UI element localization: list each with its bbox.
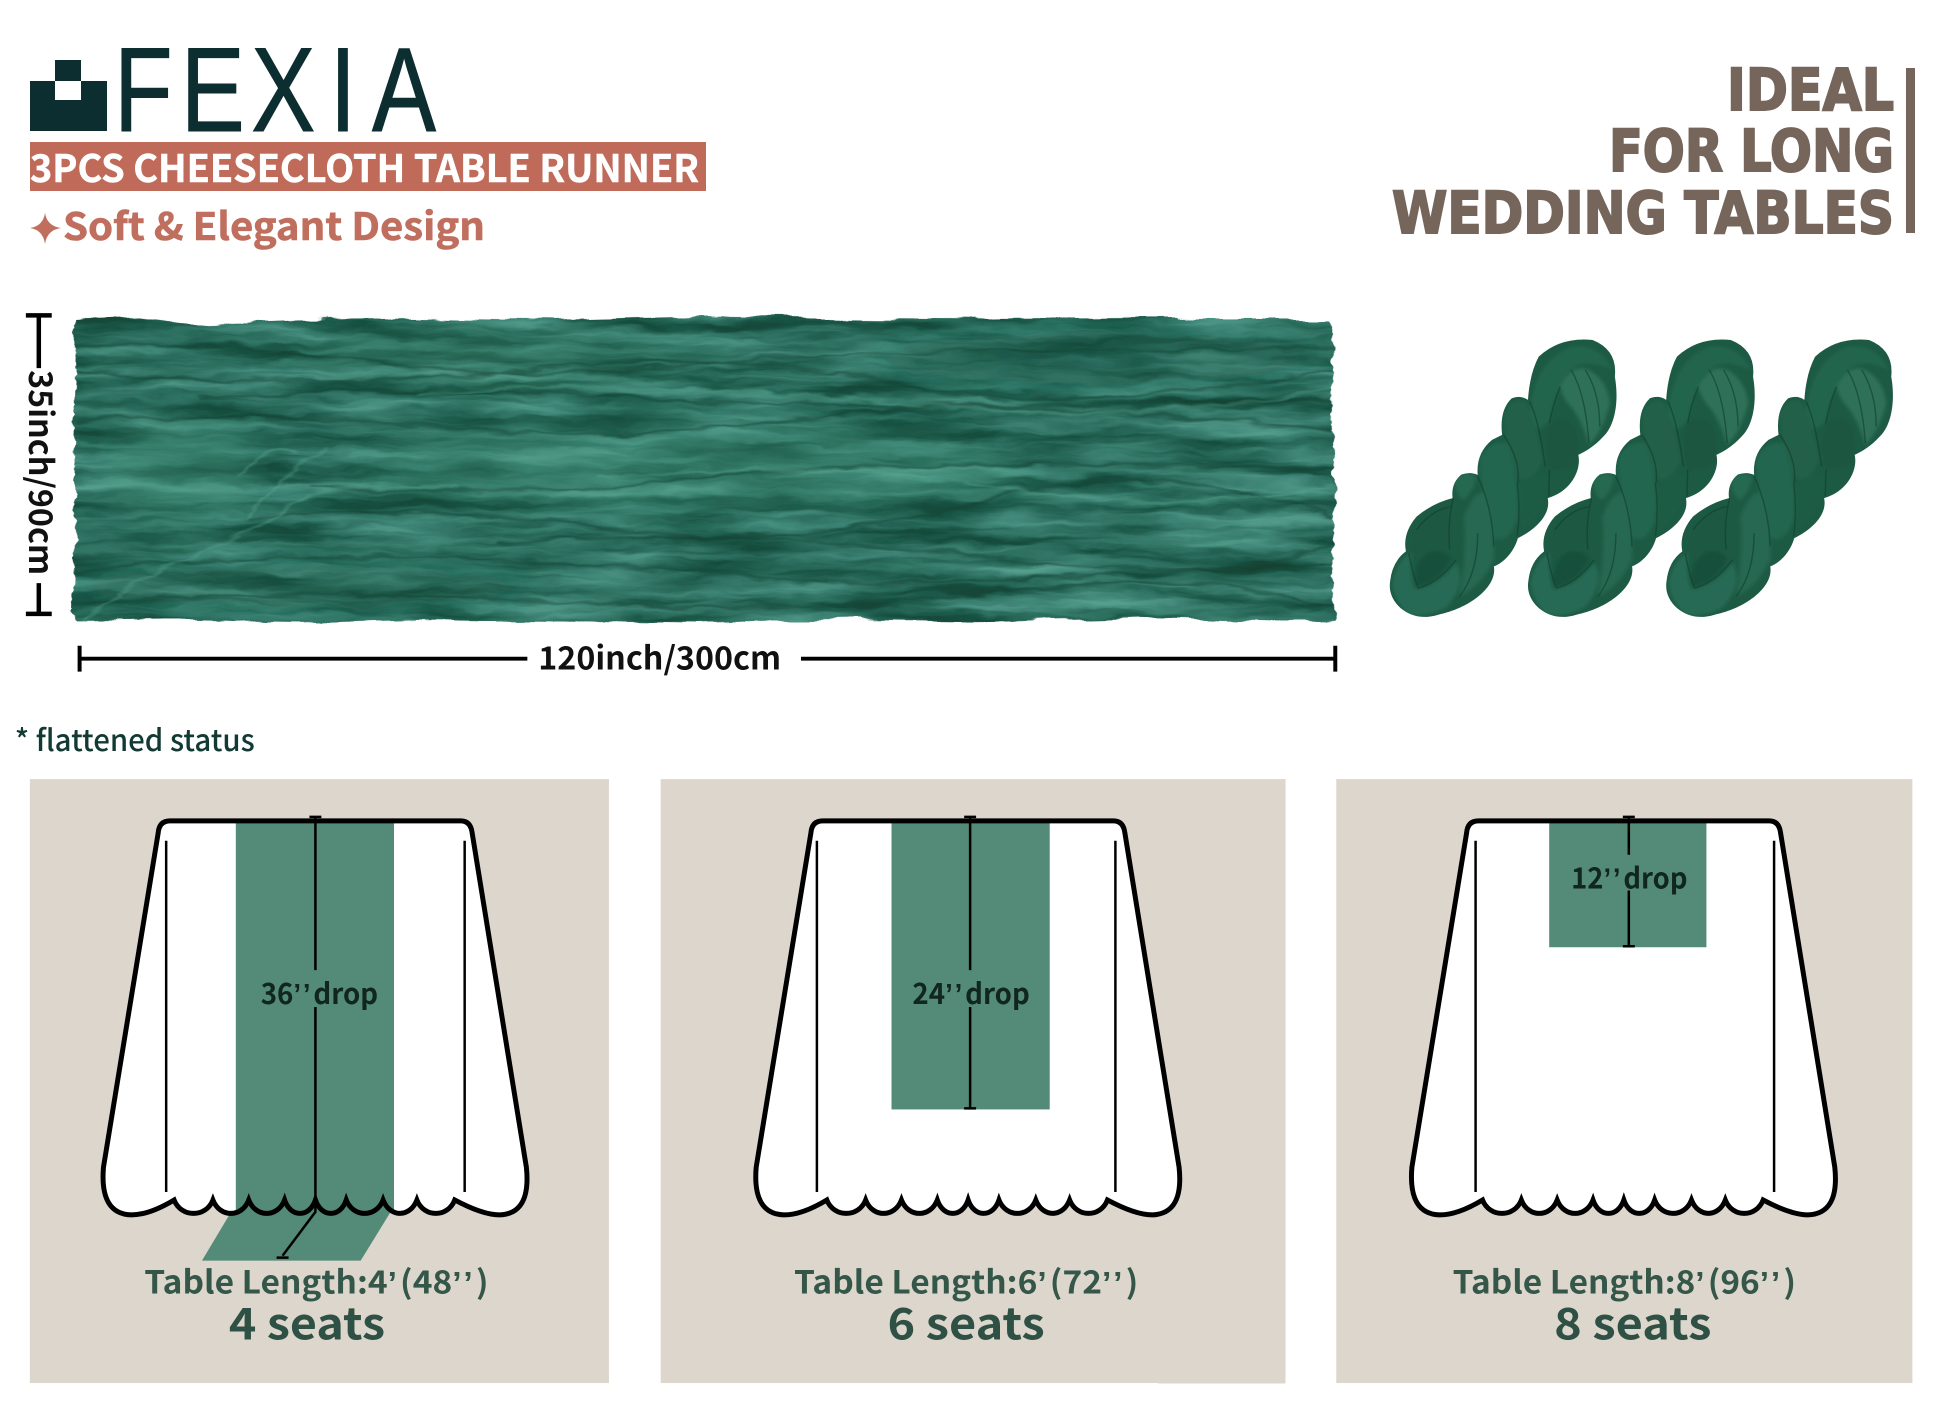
skein 2 [1528, 340, 1755, 617]
heading: ideal for long wedding tables: FOR LONG [1609, 117, 1894, 185]
panel: 8 seats [1336, 779, 1912, 1383]
icon: four-point star [30, 213, 61, 244]
skein 1 [1390, 340, 1617, 617]
dimension: fabric length 120 inch: 120inch/300cm [538, 634, 781, 680]
drop label: 24’’drop [912, 972, 1030, 1013]
tablecloth with runner [1411, 817, 1835, 1215]
seats: 4 seats [229, 1288, 385, 1352]
runner overhang [202, 1204, 390, 1261]
heading: ideal for long wedding tables [1392, 56, 1915, 247]
skein 3 [1666, 340, 1893, 617]
dimension: fabric length 120 inch [80, 634, 1335, 680]
product photo: three rolled runners [1390, 340, 1893, 617]
drop measure line [277, 817, 321, 1258]
seats: 6 seats [888, 1288, 1045, 1352]
note: flattened status: * flattened status [15, 716, 255, 760]
table length: Table Length:6 ’(72’’) [794, 1258, 1138, 1304]
drop label: 36’’drop [261, 972, 378, 1013]
icon: logo squares [30, 60, 107, 131]
dimension: fabric width 35 inch [19, 315, 66, 614]
seats: 8 seats [1554, 1288, 1711, 1352]
heading: ideal for long wedding tables: IDEAL [1727, 56, 1894, 124]
panel: 6 seats [661, 779, 1286, 1383]
dimension: fabric width 35 inch: 35inch/90cm [19, 370, 66, 575]
fabric photo: flattened green runner [70, 314, 1338, 624]
table length: Table Length:4 ’(48’’) [144, 1258, 489, 1304]
subtitle: soft and elegant design: Soft & Elegant Design [63, 196, 485, 251]
tablecloth with runner [103, 821, 527, 1219]
drop label: 12’’drop [1571, 857, 1688, 898]
brand name: FEXIA [114, 24, 436, 158]
tablecloth with runner [756, 817, 1180, 1215]
panel: 4 seats [30, 779, 609, 1383]
table length: Table Length:8 ’(96’’) [1453, 1258, 1796, 1304]
logo: FEXIA [30, 24, 436, 158]
product title banner: 3PCS CHEESECLOTH TABLE RUNNER [30, 138, 699, 193]
